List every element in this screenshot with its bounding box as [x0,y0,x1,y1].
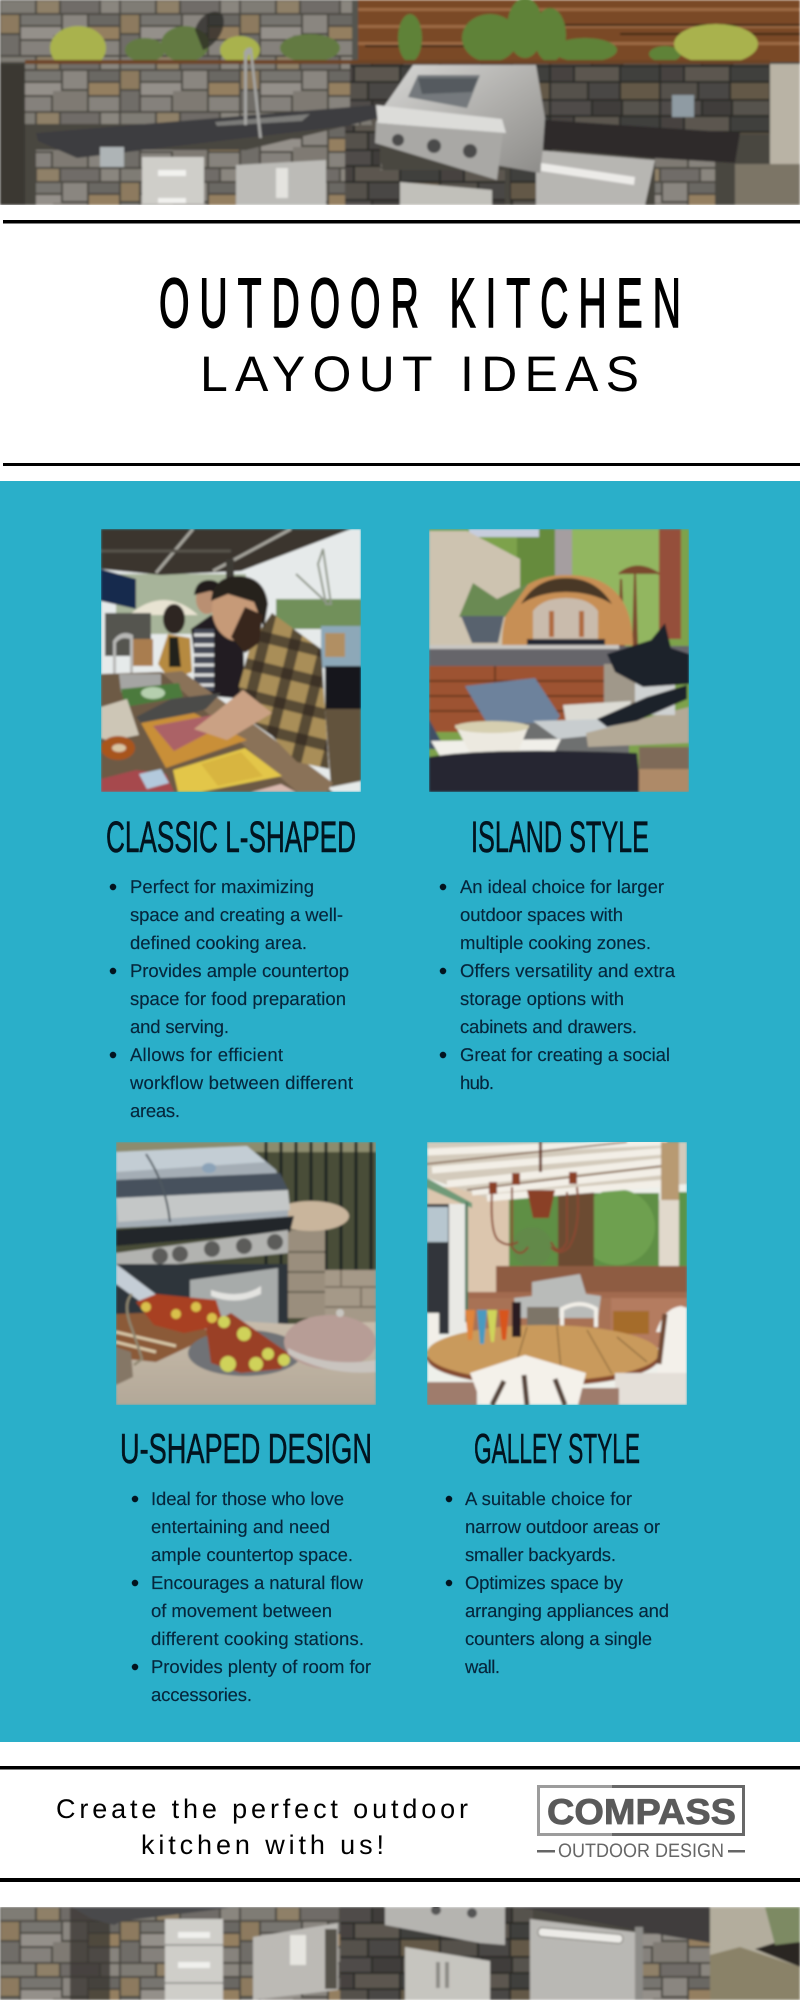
list: galley style points [446,1488,669,1677]
photo: outdoor kitchen header [0,0,800,205]
list: U-shaped design points: Ideal for those who love [151,1488,344,1509]
list: galley style points: counters along a single [465,1628,652,1649]
heading: galley style: GALLEY STYLE [474,1425,640,1472]
title line: outdoor kitchen: OUTDOOR KITCHEN [159,264,681,342]
list: classic L-shaped points: and serving. [130,1016,229,1037]
list: U-shaped design points: of movement between [151,1600,332,1621]
list: classic L-shaped points: Provides ample countertop [130,960,349,981]
list: island style points: multiple cooking zones. [460,932,651,953]
list: U-shaped design points: different cooking stations. [151,1628,364,1649]
photo: U-shaped design [116,1142,376,1405]
photo: galley style [427,1142,687,1405]
list: island style points: Offers versatility and extra [460,960,676,981]
list: classic L-shaped points: defined cooking area. [130,932,307,953]
list: galley style points: narrow outdoor areas or [465,1516,660,1537]
list: island style points: storage options with [460,988,624,1009]
list: galley style points: Optimizes space by [465,1572,624,1593]
heading: classic L-shaped: CLASSIC L-SHAPED [106,813,356,862]
photo: classic L-shaped [101,529,361,792]
list: island style points: outdoor spaces with [460,904,623,925]
heading: island style: ISLAND STYLE [471,813,649,862]
list: island style points [440,876,676,1093]
logo: Compass Outdoor Design: OUTDOOR DESIGN [558,1840,724,1862]
heading: U-shaped design: U-SHAPED DESIGN [120,1425,372,1472]
list: island style points: cabinets and drawers. [460,1016,637,1037]
list: U-shaped design points: ample countertop space. [151,1544,353,1565]
list: U-shaped design points [132,1488,371,1705]
rule: above call to action [0,1766,800,1770]
photo: island style [429,529,689,792]
list: island style points: An ideal choice for larger [460,876,664,897]
list: classic L-shaped points: areas. [130,1100,180,1121]
list: island style points: hub. [460,1072,494,1093]
panel: teal layouts panel [0,481,800,1742]
logo: Compass Outdoor Design [537,1786,745,1862]
call to action text: Create the perfect outdoor [56,1794,468,1824]
call to action text [56,1794,468,1860]
list: U-shaped design points: accessories. [151,1684,252,1705]
logo: Compass Outdoor Design: COMPASS [547,1791,736,1832]
list: classic L-shaped points: workflow between different [129,1072,353,1093]
rule: below call to action [0,1878,800,1882]
list: galley style points: wall. [464,1656,500,1677]
photo: outdoor kitchen footer [0,1907,800,2000]
title [159,264,681,402]
call to action text: kitchen with us! [141,1830,384,1860]
list: galley style points: A suitable choice for [465,1488,632,1509]
list: classic L-shaped points: Perfect for maximizing [130,876,314,897]
list: galley style points: arranging appliances and [465,1600,669,1621]
list: island style points: Great for creating a social [460,1044,670,1065]
list: galley style points: smaller backyards. [465,1544,616,1565]
list: U-shaped design points: Encourages a natural flow [151,1572,364,1593]
list: classic L-shaped points: Allows for efficient [130,1044,283,1065]
list: U-shaped design points: Provides plenty of room for [151,1656,371,1677]
rule: below header photo [3,220,800,224]
list: classic L-shaped points [110,876,353,1121]
list: classic L-shaped points: space for food preparation [130,988,346,1009]
rule: below title [3,463,800,466]
subtitle line: layout ideas: LAYOUT IDEAS [200,346,639,402]
list: U-shaped design points: entertaining and need [151,1516,330,1537]
list: classic L-shaped points: space and creating a well- [130,904,343,925]
